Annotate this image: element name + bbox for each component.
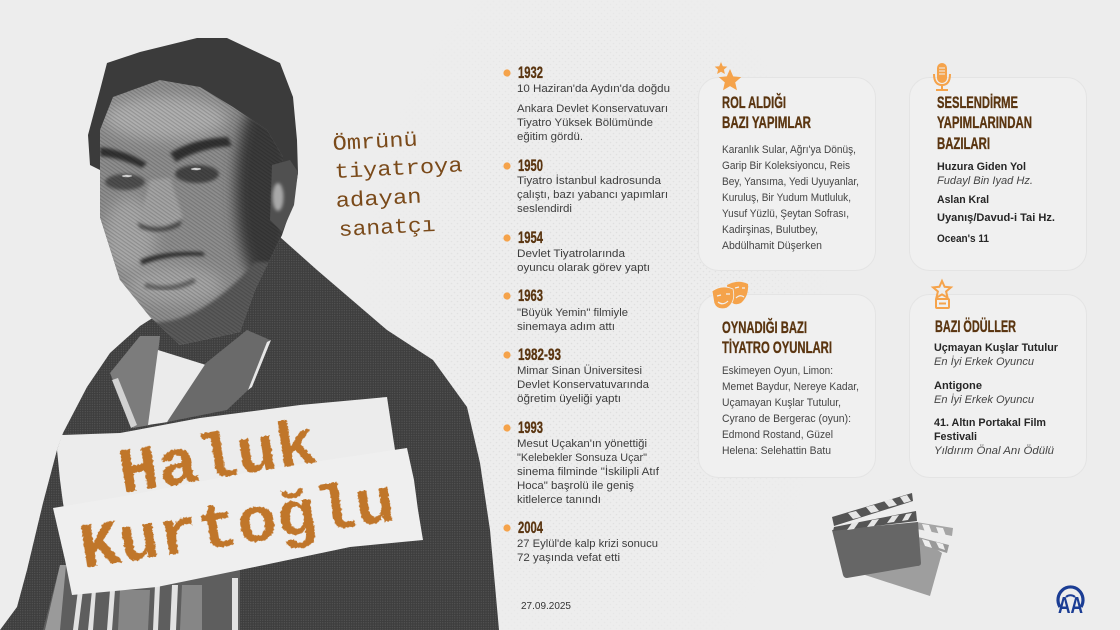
tagline: adayan — [335, 187, 422, 214]
entry 1950: 1950 — [518, 157, 543, 175]
name second line: Kurtoğlu — [75, 468, 400, 588]
list of awards — [934, 342, 1059, 457]
heading: ROL ALDIĞI — [722, 93, 786, 112]
panel: oynadığı bazı tiyatro oyunları — [698, 282, 876, 478]
date: 27.09.2025 — [521, 600, 571, 612]
list of voice roles: Aslan Kral — [937, 194, 989, 206]
entry 2004: 72 yaşında vefat etti — [517, 552, 620, 564]
list of voice roles: Ocean's 11 — [937, 233, 989, 245]
paper strip 1 — [57, 397, 405, 540]
entry 1993: Mesut Uçakan'ın yönettiği — [517, 438, 647, 450]
entry 1950: Tiyatro İstanbul kadrosunda — [517, 174, 662, 187]
icon: stars — [715, 62, 741, 90]
logo: Anadolu Ajansı: AA — [1058, 592, 1083, 618]
tagline: sanatçı — [338, 215, 436, 243]
name first line: Haluk — [114, 411, 322, 513]
entry 1932: eğitim gördü. — [517, 131, 583, 143]
entry 1950: seslendirdi — [517, 203, 572, 215]
icon: film clapperboards — [832, 493, 953, 596]
entry 1954: oyuncu olarak görev yaptı — [517, 262, 650, 274]
icon: trophy star — [933, 281, 951, 308]
entry 1982-93: 1982-93 — [518, 346, 561, 364]
entry 1932 — [503, 64, 670, 143]
list of plays — [722, 365, 859, 457]
list of productions: Karanlık Sular, Ağrı'ya Dönüş, — [722, 144, 856, 156]
entry 1982-93: Devlet Konservatuvarında — [517, 379, 650, 391]
entry 1963: "Büyük Yemin" filmiyle — [517, 307, 628, 319]
heading — [722, 93, 811, 132]
heading: TİYATRO OYUNLARI — [722, 338, 832, 357]
entry 1950 — [503, 157, 668, 215]
mouth — [140, 252, 205, 265]
list of productions: Kuruluş, Bir Yudum Mutluluk, — [722, 192, 851, 204]
hair and head silhouette — [88, 38, 298, 320]
entry 1954 — [503, 229, 650, 274]
heading: BAZILARI — [937, 134, 990, 153]
portrait of Haluk Kurtoğlu — [0, 38, 499, 630]
list of awards: Uçmayan Kuşlar Tutulur — [934, 342, 1059, 354]
tagline: Ömrünü — [332, 129, 418, 157]
entry 1982-93: Mimar Sinan Üniversitesi — [517, 365, 642, 377]
entry 1963 — [503, 287, 628, 333]
list of awards: 41. Altın Portakal Film — [934, 417, 1046, 429]
entry 1993: 1993 — [518, 419, 543, 437]
panel: seslendirme yapımlarından bazıları — [910, 63, 1086, 270]
face — [100, 80, 283, 345]
entry 1932: Ankara Devlet Konservatuvarı — [517, 103, 668, 115]
panel: rol aldığı bazı yapımlar — [698, 62, 876, 270]
list of awards: Yıldırım Önal Anı Ödülü — [934, 445, 1054, 457]
list of plays: Edmond Rostand, Güzel — [722, 429, 833, 441]
entry 1993: "Kelebekler Sonsuza Uçar" — [517, 452, 647, 464]
eyebrows — [100, 147, 147, 168]
timeline — [503, 64, 670, 564]
jacket texture — [0, 237, 499, 630]
list of voice roles — [937, 161, 1055, 245]
entry 1993: sinema filminde "İskilipli Atıf — [517, 465, 660, 478]
neck — [154, 261, 269, 345]
list of productions: Yusuf Yüzlü, Şeytan Sofrası, — [722, 208, 849, 220]
shirt and collar — [43, 330, 271, 630]
list of productions: Bey, Yansıma, Yedi Uyuyanlar, — [722, 176, 859, 188]
entry 1993: Hoca" başrolü ile geniş — [517, 480, 635, 492]
list of plays: Uçamayan Kuşlar Tutulur, — [722, 397, 841, 409]
list of productions: Kadirşinas, Bulutbey, — [722, 224, 818, 236]
entry 1993: kitlelerce tanındı — [517, 494, 601, 506]
entry 2004: 2004 — [518, 519, 544, 537]
entry 1993 — [503, 419, 660, 506]
nose — [145, 178, 182, 226]
panel: bazı ödüller — [910, 281, 1086, 478]
list of voice roles: Fudayl Bin Iyad Hz. — [937, 175, 1033, 187]
cheek highlights — [104, 197, 156, 273]
list of plays: Eskimeyen Oyun, Limon: — [722, 365, 833, 377]
jacket — [0, 237, 499, 630]
entry 1963: sinemaya adım attı — [517, 321, 615, 333]
list of voice roles: Uyanış/Davud-i Tai Hz. — [937, 212, 1055, 224]
list of awards: Festivali — [934, 431, 977, 443]
entry 1950: çalıştı, bazı yabancı yapımları — [517, 189, 668, 201]
list of voice roles: Huzura Giden Yol — [937, 161, 1026, 173]
logo: Anadolu Ajansı — [1058, 587, 1083, 618]
entry 2004: 27 Eylül'de kalp krizi sonucu — [517, 538, 658, 550]
paper strip 2 — [53, 448, 423, 595]
list of plays: Helena: Selehattin Batu — [722, 445, 831, 457]
heading: BAZI YAPIMLAR — [722, 113, 811, 132]
list of awards: En İyi Erkek Oyuncu — [934, 356, 1034, 368]
tagline — [332, 129, 463, 243]
background — [424, 43, 764, 596]
list of plays: Cyrano de Bergerac (oyun): — [722, 413, 851, 425]
entry 2004 — [503, 519, 658, 564]
entry 1954: 1954 — [518, 229, 544, 247]
list of awards: En İyi Erkek Oyuncu — [934, 394, 1034, 406]
list of productions: Garip Bir Koleksiyoncu, Reis — [722, 160, 850, 172]
heading: YAPIMLARINDAN — [937, 113, 1032, 132]
list of productions — [722, 144, 859, 252]
icon: microphone — [934, 63, 950, 90]
entry 1954: Devlet Tiyatrolarında — [517, 248, 626, 260]
icon: theatre masks — [712, 282, 748, 309]
tagline: tiyatroya — [334, 155, 463, 185]
heading: SESLENDİRME — [937, 93, 1018, 112]
heading — [937, 93, 1032, 153]
entry 1982-93: öğretim üyeliği yaptı — [517, 393, 621, 405]
entry 1932: 10 Haziran'da Aydın'da doğdu — [517, 83, 670, 95]
ear — [270, 160, 298, 232]
name label on torn paper — [53, 397, 423, 595]
forehead highlight — [103, 96, 227, 140]
engraving lines — [100, 80, 283, 344]
entry 1932: 1932 — [518, 64, 543, 82]
list of productions: Abdülhamit Düşerken — [722, 240, 822, 252]
entry 1932: Tiyatro Yüksek Bölümünde — [517, 117, 653, 129]
entry 1963: 1963 — [518, 287, 543, 305]
shaded side of face — [226, 112, 283, 276]
entry 1982-93 — [503, 346, 650, 405]
heading: OYNADIĞI BAZI — [722, 318, 807, 337]
list of plays: Memet Baydur, Nereye Kadar, — [722, 381, 859, 393]
eyes — [105, 174, 145, 190]
heading: BAZI ÖDÜLLER — [935, 317, 1016, 336]
heading — [722, 318, 832, 357]
list of awards: Antigone — [934, 380, 982, 392]
